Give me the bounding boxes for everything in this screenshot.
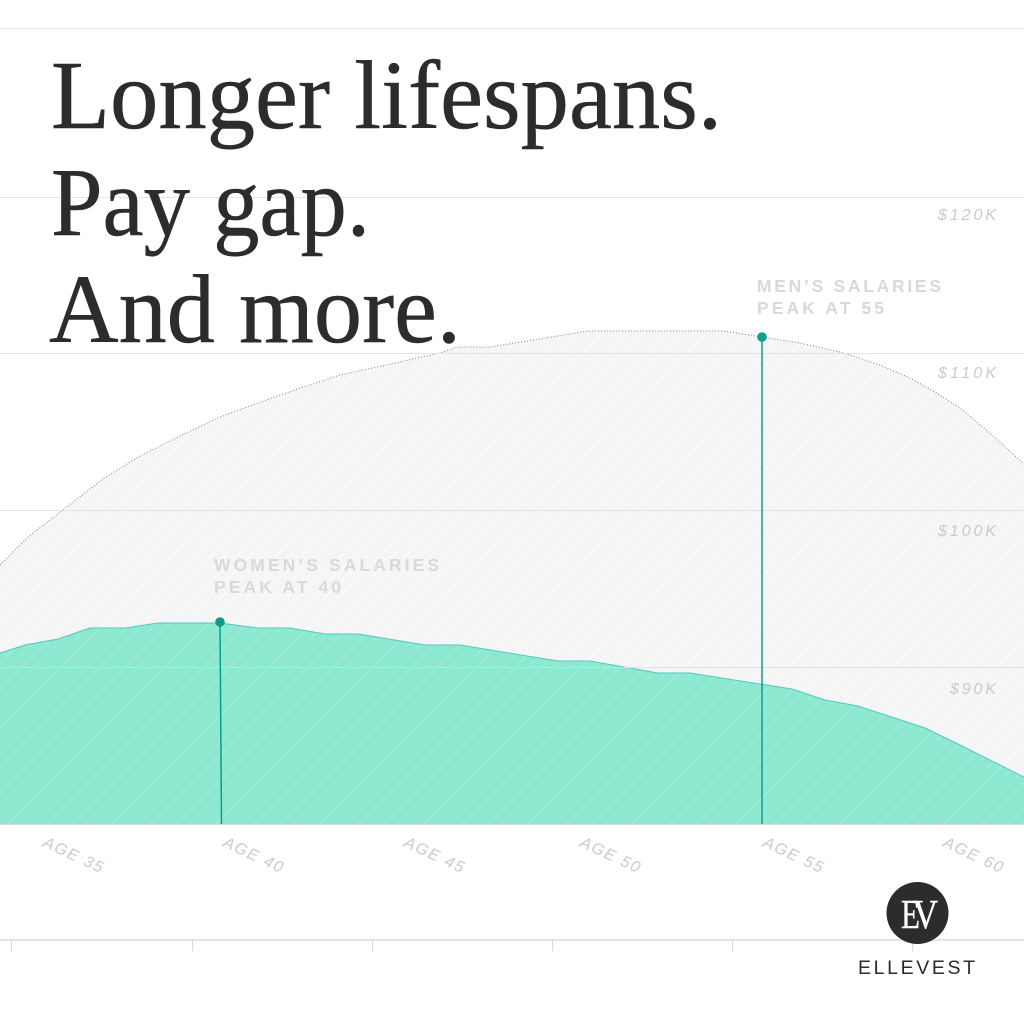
logo: Ellevest — [858, 882, 975, 979]
age axis labels — [39, 834, 1007, 877]
salary axis labels — [937, 207, 997, 698]
callout: men's peak: PEAK AT 55 — [757, 298, 887, 318]
age axis labels: AGE 35 — [39, 834, 107, 877]
callout: women's peak: PEAK AT 40 — [214, 577, 344, 597]
age axis labels: AGE 50 — [576, 834, 644, 877]
age axis labels: AGE 60 — [939, 834, 1007, 877]
callout: women's peak — [214, 555, 442, 597]
salary axis labels: $90K — [949, 681, 997, 698]
age axis labels: AGE 55 — [759, 834, 827, 877]
callout: men's peak: MEN’S SALARIES — [757, 276, 944, 296]
title: Pay gap. — [51, 149, 370, 256]
age axis labels: AGE 40 — [219, 834, 287, 877]
men's peak marker — [757, 332, 767, 824]
women's peak marker — [215, 617, 225, 824]
callout: women's peak: WOMEN’S SALARIES — [214, 555, 442, 575]
age axis labels: AGE 45 — [400, 834, 468, 877]
salary axis labels: $120K — [937, 207, 997, 224]
men's salary area — [0, 331, 1024, 824]
women's salary area — [0, 623, 1024, 824]
logo: Ellevest: ELLEVEST — [858, 957, 975, 979]
title — [49, 42, 722, 363]
salary axis labels: $110K — [937, 365, 997, 382]
salary axis labels: $100K — [937, 523, 997, 540]
title: Longer lifespans. — [51, 42, 722, 149]
title: And more. — [49, 256, 461, 363]
callout: men's peak — [757, 276, 944, 318]
logo: Ellevest: E — [901, 891, 920, 937]
logo: Ellevest: V — [913, 891, 938, 937]
